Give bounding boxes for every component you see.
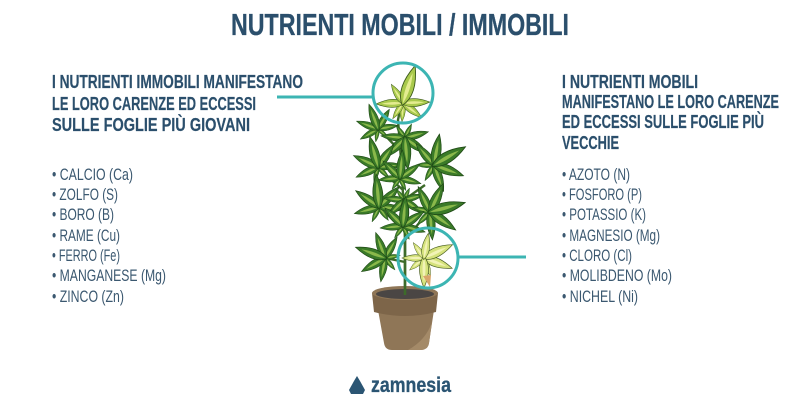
left heading: immobile nutrients: LE LORO CARENZE ED ECCESSI — [52, 93, 256, 114]
right list: mobile nutrients: • MOLIBDENO (Mo) — [562, 267, 672, 285]
right list: mobile nutrients: • POTASSIO (K) — [562, 206, 646, 224]
left heading: immobile nutrients: SULLE FOGLIE PIÙ GIOVANI — [52, 114, 250, 135]
title: NUTRIENTI MOBILI / IMMOBILI — [231, 7, 569, 42]
right list: mobile nutrients: • FOSFORO (P) — [562, 186, 642, 204]
right heading: mobile nutrients — [562, 71, 779, 153]
logo: zamnesia — [349, 374, 451, 397]
right heading: mobile nutrients: VECCHIE — [562, 132, 619, 153]
left list: immobile nutrients: • FERRO (Fe) — [52, 247, 120, 265]
dark leaves — [346, 97, 480, 286]
left list: immobile nutrients: • RAME (Cu) — [52, 227, 120, 245]
left list: immobile nutrients: • ZINCO (Zn) — [52, 288, 124, 306]
left heading: immobile nutrients: I NUTRIENTI IMMOBILI MANIFESTANO — [52, 71, 303, 92]
logo: zamnesia: zamnesia — [371, 374, 451, 397]
right list: mobile nutrients: • AZOTO (N) — [562, 166, 630, 184]
left heading: immobile nutrients — [52, 71, 303, 135]
right list: mobile nutrients — [562, 166, 672, 306]
callout: lower leaf circle — [398, 228, 526, 288]
left list: immobile nutrients: • CALCIO (Ca) — [52, 166, 133, 184]
illustration: potted plant — [277, 57, 526, 350]
icon: logo mark — [349, 376, 365, 394]
right list: mobile nutrients: • NICHEL (Ni) — [562, 288, 638, 306]
left list: immobile nutrients: • BORO (B) — [52, 206, 114, 224]
callout: upper leaf circle — [277, 63, 433, 123]
left list: immobile nutrients: • ZOLFO (S) — [52, 186, 118, 204]
pale old leaf — [397, 229, 458, 293]
right list: mobile nutrients: • CLORO (Cl) — [562, 247, 632, 265]
left list: immobile nutrients — [52, 166, 166, 306]
yellowing young leaf — [372, 57, 440, 129]
pot — [372, 240, 438, 350]
right list: mobile nutrients: • MAGNESIO (Mg) — [562, 227, 660, 245]
stem — [378, 105, 425, 295]
left list: immobile nutrients: • MANGANESE (Mg) — [52, 267, 166, 285]
right heading: mobile nutrients: I NUTRIENTI MOBILI — [562, 71, 698, 92]
